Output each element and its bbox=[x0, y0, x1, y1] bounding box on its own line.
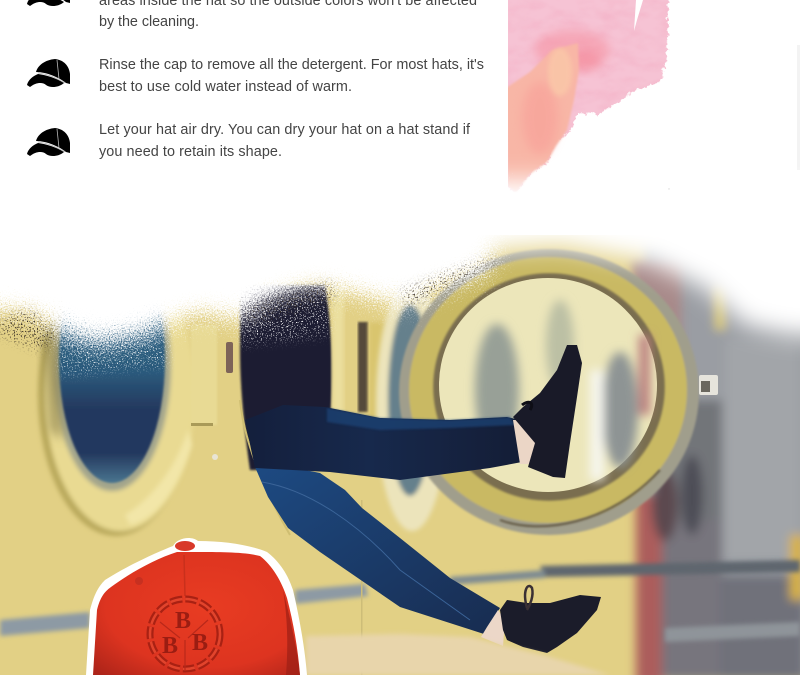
instruction list bbox=[27, 0, 484, 160]
sneaker: lower bbox=[481, 586, 601, 653]
dark specks along edge bbox=[0, 255, 500, 350]
door highlight bbox=[125, 430, 192, 525]
machine door: left bbox=[38, 237, 195, 536]
sock bbox=[513, 420, 537, 464]
door glass with reflections bbox=[439, 278, 657, 492]
icon: cap 2 bbox=[27, 59, 70, 87]
center seam bbox=[184, 555, 185, 596]
step text: air dry: you need to retain its shape. bbox=[99, 144, 282, 160]
machine seam bbox=[361, 500, 362, 675]
chain logo bbox=[150, 599, 220, 670]
icon: cap 3 bbox=[27, 128, 70, 156]
step text: air dry: Let your hat air dry. You can dry your hat on a hat stand if bbox=[99, 122, 471, 138]
watercolor splash bbox=[508, 0, 670, 192]
white die-cut outline bbox=[86, 538, 307, 675]
icon: cap 1 bbox=[27, 0, 70, 6]
white fade top: speckled bbox=[0, 180, 490, 345]
step text: rinse: best to use cold water instead of warm. bbox=[99, 79, 352, 95]
red hat sticker bbox=[86, 538, 307, 675]
step text: protect areas: by the cleaning. bbox=[99, 14, 199, 30]
white fade top: soft bbox=[0, 180, 800, 335]
faint speck bbox=[668, 188, 670, 190]
horizontal machine rails bbox=[0, 560, 800, 642]
side shading bbox=[283, 590, 300, 675]
sock bbox=[481, 610, 505, 646]
laundromat photo scene bbox=[0, 180, 800, 675]
hat crown bbox=[93, 552, 300, 675]
chain logo: B bbox=[162, 633, 178, 659]
step text: rinse bbox=[99, 57, 484, 95]
door shadow bbox=[42, 330, 62, 440]
blurred background right bbox=[632, 240, 800, 675]
machine door: centre drum bbox=[240, 285, 409, 535]
jeans: upper leg bbox=[245, 405, 522, 480]
faint page edge bbox=[797, 45, 800, 170]
chain logo: B bbox=[192, 630, 208, 656]
top button bbox=[175, 541, 195, 551]
machine door: behind legs bbox=[376, 279, 448, 531]
wall of yellow machines bbox=[0, 235, 800, 675]
chain logo: B bbox=[175, 608, 191, 634]
step text: air dry bbox=[99, 122, 471, 160]
step text: rinse: Rinse the cap to remove all the detergent. For most hats, it's bbox=[99, 57, 484, 73]
step text: protect areas bbox=[99, 0, 477, 30]
sneaker: upper bbox=[513, 345, 582, 478]
door panel and hinge bbox=[191, 325, 233, 460]
jeans: lower leg bbox=[255, 466, 500, 634]
eyelet bbox=[135, 577, 143, 585]
large open door bbox=[399, 249, 699, 535]
door latch bbox=[699, 375, 718, 395]
ring shadow stroke bbox=[500, 470, 660, 526]
white specks along edge bbox=[60, 285, 330, 375]
wooden tabletop bbox=[306, 634, 610, 675]
